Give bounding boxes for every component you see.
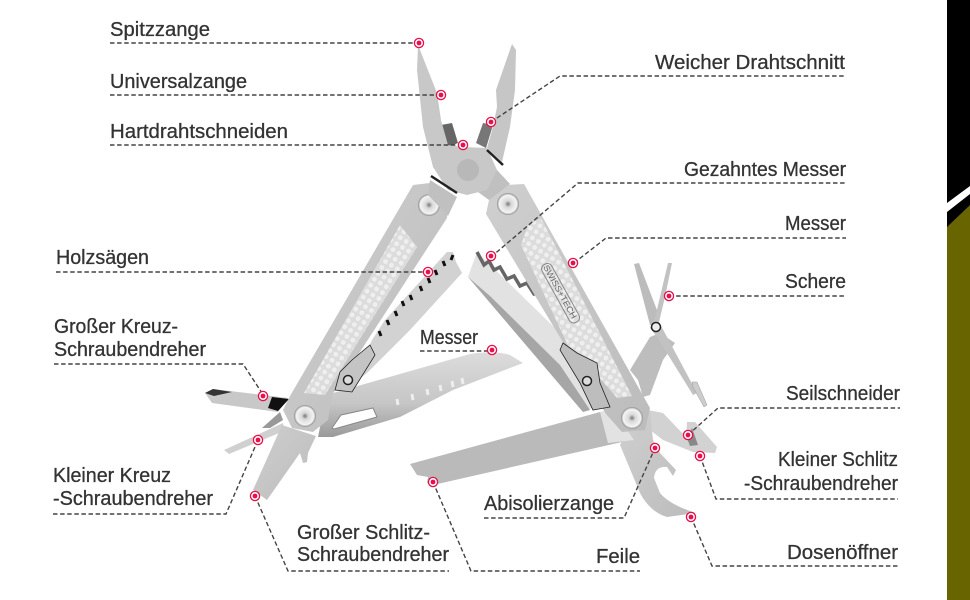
label: Kleiner Kreuz-Schraubendreher (53, 440, 258, 514)
label: Messer (upper) (574, 213, 846, 263)
label: Messer (upper): Messer (785, 213, 846, 235)
right handle (486, 184, 650, 432)
can opener (620, 412, 696, 517)
label: Messer (lower): Messer (420, 327, 478, 349)
multitool illustration (205, 44, 717, 517)
saw blade (352, 252, 462, 385)
label: Seilschneider: Seilschneider (786, 383, 900, 405)
label: Weicher Drahtschnitt: Weicher Drahtschnitt (655, 52, 845, 74)
pliers (417, 44, 516, 216)
label: Kleiner Schlitz-Schraubendreher (700, 449, 898, 499)
lower knife (318, 352, 523, 437)
label: Weicher Drahtschnitt (491, 52, 845, 122)
label: Großer Schlitz-Schraubendreher: Großer Schlitz- (297, 522, 430, 544)
label: Großer Kreuz-Schraubendreher (54, 316, 264, 396)
left handle tools (205, 389, 316, 500)
label: Großer Schlitz-Schraubendreher: Schraubendreher (297, 544, 449, 566)
file (410, 409, 634, 485)
label: Kleiner Kreuz-Schraubendreher: Kleiner Kreuz (53, 465, 171, 487)
red marker dots (250, 38, 705, 522)
label: Seilschneider (688, 383, 900, 435)
label: Kleiner Kreuz-Schraubendreher: -Schraubendreher (53, 488, 213, 510)
left handle (283, 183, 448, 432)
label: Gezahntes Messer: Gezahntes Messer (684, 159, 846, 181)
label: Gezahntes Messer (491, 159, 846, 257)
label: Feile: Feile (596, 546, 640, 568)
label: Spitzzange: Spitzzange (110, 19, 210, 41)
label: Holzsägen: Holzsägen (56, 247, 149, 269)
label: Universalzange: Universalzange (110, 71, 247, 93)
scissors (630, 263, 707, 407)
label: Abisolierzange: Abisolierzange (484, 493, 614, 515)
label: Schere: Schere (785, 271, 846, 293)
serrated knife (468, 252, 600, 412)
side panel: black and olive corner (947, 0, 970, 600)
label: Hartdrahtschneiden: Hartdrahtschneiden (110, 121, 288, 143)
label: Abisolierzange (484, 448, 655, 518)
label: Feile (433, 482, 640, 571)
label: Kleiner Schlitz-Schraubendreher: Kleiner Schlitz (778, 449, 898, 471)
label: Dosenöffner (691, 517, 898, 566)
label: Großer Kreuz-Schraubendreher: Großer Kreuz- (54, 316, 178, 338)
label: Dosenöffner: Dosenöffner (787, 542, 898, 564)
rope cutter and small flat screwdriver (648, 410, 717, 453)
label: Kleiner Schlitz-Schraubendreher: -Schraubendreher (744, 473, 898, 495)
right handle: SWISS+TECH (541, 263, 579, 320)
label: Großer Kreuz-Schraubendreher: Schraubendreher (54, 339, 206, 361)
label: Großer Schlitz-Schraubendreher (255, 496, 449, 571)
